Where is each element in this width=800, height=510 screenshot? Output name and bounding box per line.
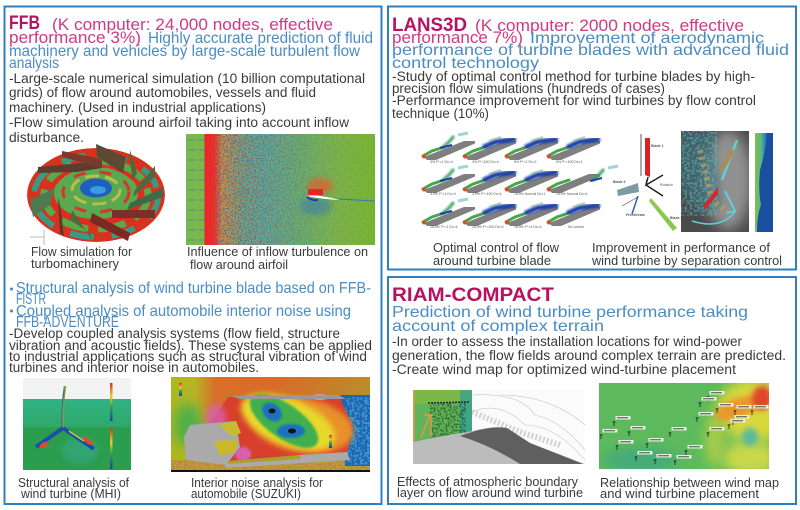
image: blade flow control matrix: 3.5% F*=1 Dc=4 xyxy=(430,192,456,196)
image: blade flow control matrix: 5% F*=1 Dc=1 xyxy=(514,160,537,164)
image: blade flow control matrix: 16.5% F*=1 Dc=4 xyxy=(430,225,458,229)
text block: large-scale simulation: -Large-scale numerical simulation (10 billion computational xyxy=(9,71,365,86)
heading: LANS3D name and K computer: LANS3D xyxy=(392,15,467,36)
heading: FFB name and K computer: FFB xyxy=(9,13,40,34)
caption: boundary layer: Effects of atmospheric boundary xyxy=(397,475,579,489)
caption: optimal control: around turbine blade xyxy=(433,254,551,268)
text block: optimal control study: -Performance improvement for wind turbines by flow control xyxy=(392,93,756,108)
caption: wind map xyxy=(600,476,779,501)
caption: flow simulation: Flow simulation for xyxy=(31,245,132,259)
caption: wind turbine xyxy=(18,476,129,501)
caption: optimal control xyxy=(433,241,560,268)
bullets: coupled analysis headings: FFB-ADVENTURE xyxy=(16,314,119,331)
image: rotor blade diagram: Blade 2 xyxy=(670,216,683,220)
subheading: wind turbine performance: Prediction of wind turbine performance taking xyxy=(392,304,748,321)
image: blade flow control matrix: 3.5% F*=100 Dc=4 xyxy=(472,192,502,196)
caption: boundary layer xyxy=(397,475,583,500)
heading: FFB name and K computer: analysis xyxy=(9,55,59,72)
text block: coupled systems: to industrial applications such as structural vibration of wind xyxy=(9,349,367,364)
heading: FFB name and K computer xyxy=(9,13,373,72)
heading: FFB name and K computer: performance 3%) xyxy=(9,28,141,47)
text block: coupled systems: -Develop coupled analysis systems (flow field, structure xyxy=(9,326,340,341)
caption: wind turbine: Structural analysis of xyxy=(18,476,129,490)
bullets: coupled analysis headings: FISTR xyxy=(16,291,46,308)
caption: interior noise xyxy=(191,476,323,501)
text block: large-scale simulation: -Flow simulation around airfoil taking into account inflow xyxy=(9,115,349,130)
image: blade surface contour xyxy=(755,133,773,232)
heading: LANS3D name and K computer: Improvement of aerodynamic xyxy=(530,30,764,47)
text block: wind-power locations: -Create wind map for optimized wind-turbine placement xyxy=(392,362,736,377)
heading: FFB name and K computer: (K computer: 24,000 nodes, effective xyxy=(52,15,333,34)
image: blade flow control matrix: 3% F*=100 Dc=4 xyxy=(472,160,499,164)
heading: LANS3D name and K computer: control technology xyxy=(392,55,539,72)
image: blade flow control matrix xyxy=(422,133,618,229)
text block: optimal control study: technique (10%) xyxy=(392,106,489,121)
text block: large-scale simulation: machinery. (Used in industrial applications) xyxy=(9,100,266,115)
panel: LANS3D xyxy=(388,6,796,270)
heading: FFB name and K computer: machinery and vehicles by large-scale turbulent flow xyxy=(9,43,360,60)
text block: coupled systems: turbines and interior noise in automobiles. xyxy=(9,360,259,375)
caption: optimal control: Optimal control of flow xyxy=(433,241,560,255)
text block: wind-power locations xyxy=(392,334,786,377)
caption: inflow turbulence xyxy=(187,245,368,272)
caption: interior noise: Interior noise analysis for xyxy=(191,476,323,490)
image: wind map with turbine placement xyxy=(599,383,769,469)
caption: interior noise: automobile (SUZUKI) xyxy=(191,487,301,501)
image: blade flow control matrix: 16.5% F*=100 Dc=4 xyxy=(472,225,504,229)
panel: FFB xyxy=(4,6,382,504)
caption: inflow turbulence: Influence of inflow turbulence on xyxy=(187,245,368,259)
image: rotor blade diagram: Blade 1 xyxy=(651,144,664,148)
image: rotor blade diagram: Rotation xyxy=(660,183,673,187)
heading: LANS3D name and K computer: (K computer: 2000 nodes, effective xyxy=(475,16,744,35)
image: turbomachinery flow simulation xyxy=(27,144,165,245)
text block: coupled systems xyxy=(9,326,372,375)
text block: wind-power locations: generation, the flow fields around complex terrain are predicted. xyxy=(392,348,786,363)
bullets: coupled analysis headings: Coupled analysis of automobile interior noise using xyxy=(16,303,351,320)
text block: optimal control study: precision flow simulations (hundreds of cases) xyxy=(392,81,665,96)
image: blade flow control matrix: 14.5% Normal Dc=1 xyxy=(514,192,545,196)
text block: large-scale simulation xyxy=(9,71,365,145)
caption: wind map: and wind turbine placement xyxy=(600,487,760,501)
caption: inflow turbulence: flow around airfoil xyxy=(190,258,288,272)
panel: RIAM-COMPACT xyxy=(388,277,796,504)
image: rotor blade diagram: Freestream xyxy=(626,213,645,217)
heading: LANS3D name and K computer xyxy=(392,15,789,72)
image: turbine vortex visualization xyxy=(681,130,752,232)
caption: boundary layer: layer on flow around wind turbine xyxy=(397,486,583,500)
heading: FFB name and K computer: Highly accurate prediction of fluid xyxy=(148,30,373,47)
heading: LANS3D name and K computer: performance 7%) xyxy=(392,28,523,47)
subheading: wind turbine performance xyxy=(392,304,748,335)
image: airfoil inflow turbulence xyxy=(186,134,375,245)
caption: separation control: wind turbine by separation control xyxy=(591,254,782,268)
image: blade flow control matrix: 3% F*=1 Dc=4 xyxy=(430,160,453,164)
image: atmospheric boundary layer over terrain xyxy=(413,390,585,464)
caption: flow simulation xyxy=(31,245,132,271)
caption: wind turbine: wind turbine (MHI) xyxy=(20,487,121,501)
image: automobile interior noise xyxy=(171,377,370,472)
text block: large-scale simulation: grids) of flow around automobiles, vessels and fluid xyxy=(9,85,316,100)
caption: separation control: Improvement in performance of xyxy=(592,241,771,255)
image: rotor blade diagram xyxy=(613,135,683,231)
caption: flow simulation: turbomachinery xyxy=(31,257,120,271)
subheading: wind turbine performance: account of complex terrain xyxy=(392,318,604,335)
text block: large-scale simulation: disturbance. xyxy=(9,130,84,145)
text block: wind-power locations: -In order to assess the installation locations for wind-power xyxy=(392,334,743,349)
text block: optimal control study: -Study of optimal control method for turbine blades by high- xyxy=(392,69,755,84)
image: blade flow control matrix: 16.5% F*=4 Dc=4 xyxy=(514,225,542,229)
heading: LANS3D name and K computer: performance of turbine blades with advanced fluid xyxy=(392,42,789,59)
text block: optimal control study xyxy=(392,69,756,121)
caption: separation control xyxy=(591,241,782,268)
image: rotor blade diagram: Blade 3 xyxy=(613,180,626,184)
bullets: coupled analysis headings: Structural analysis of wind turbine blade based on FFB- xyxy=(16,280,371,297)
bullets: coupled analysis headings xyxy=(10,280,371,331)
image: blade flow control matrix: No control xyxy=(568,225,584,229)
image: wind turbine structural analysis xyxy=(23,378,131,470)
text block: coupled systems: vibration and acoustic fields). These systems can be applied xyxy=(9,338,372,353)
caption: wind map: Relationship between wind map xyxy=(600,476,779,490)
image: blade flow control matrix: 5% F*=100 Dc=1 xyxy=(556,160,583,164)
image: blade flow control matrix: 14.5% Normal Dc=4 xyxy=(556,192,587,196)
heading: RIAM-COMPACT name: RIAM-COMPACT xyxy=(392,285,554,306)
